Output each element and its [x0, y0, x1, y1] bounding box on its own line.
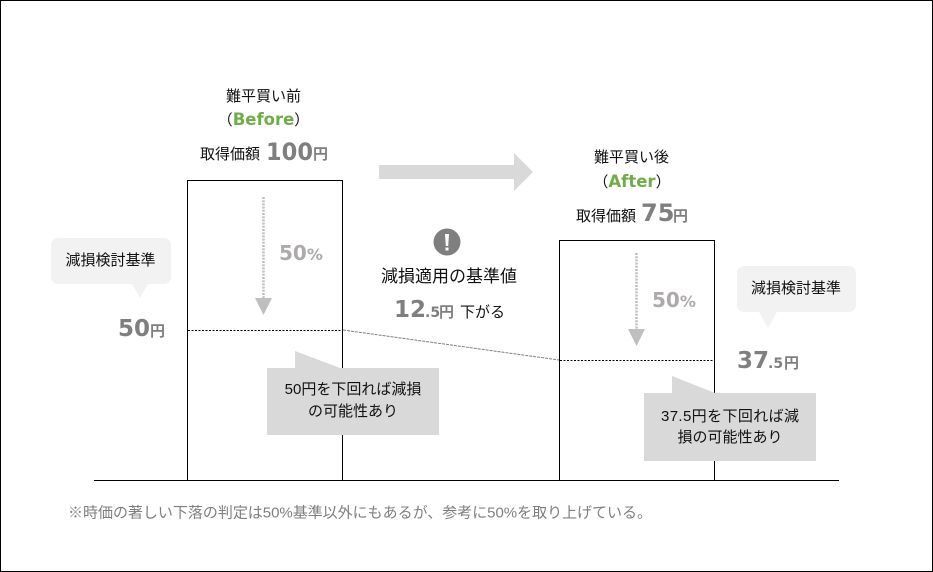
after bar — [560, 240, 714, 480]
text: criterion change: 減損適用の基準値 — [381, 267, 517, 286]
value: 12.5 yen decrease: .5 — [425, 305, 440, 321]
speech bubble: before criterion: 減損検討基準 — [65, 252, 156, 269]
heading: after: 難平買い後 — [594, 149, 669, 166]
footnote: ※時価の著しい下落の判定は50%基準以外にもあるが、参考に50%を取り上げている。 — [68, 504, 652, 522]
heading: before: 取得価額 — [200, 146, 260, 163]
connector line between thresholds — [343, 330, 559, 360]
heading: before: 難平買い前 — [226, 88, 301, 105]
callout: before — [267, 351, 439, 435]
value: 12.5 yen decrease: 12 — [394, 297, 426, 323]
heading: after — [576, 149, 688, 227]
heading: after: 75 — [641, 199, 674, 227]
value: before criterion 50 yen: 50 — [118, 316, 150, 342]
before threshold line — [188, 330, 342, 332]
down arrow: before 50% — [255, 197, 272, 315]
before bar — [188, 180, 342, 480]
callout: before: 50円を下回れば減損 — [285, 381, 421, 398]
label: before 50%: 50% — [279, 241, 323, 265]
value: before criterion 50 yen: 円 — [150, 323, 165, 340]
icon: exclamation — [434, 228, 460, 256]
speech bubble: after criterion: 減損検討基準 — [751, 280, 841, 297]
down arrow: after 50% — [628, 253, 645, 346]
heading: before: （Before） — [218, 110, 309, 129]
value: after criterion 37.5 yen: 円 — [784, 355, 799, 372]
baseline axis — [94, 480, 839, 482]
heading: before: 100 — [266, 138, 313, 166]
speech bubble: after criterion — [737, 266, 856, 328]
callout: after: 損の可能性あり — [677, 429, 783, 446]
heading: after: 取得価額 — [576, 208, 636, 225]
big arrow: before to after — [379, 153, 533, 191]
callout: after: 37.5円を下回れば減 — [661, 408, 799, 425]
heading: before — [200, 88, 328, 166]
heading: after: （After） — [593, 172, 671, 191]
value: after criterion 37.5 yen: .5 — [768, 356, 783, 372]
callout: after — [644, 376, 816, 461]
heading: before: 円 — [313, 146, 328, 163]
value: after criterion 37.5 yen: 37 — [737, 348, 769, 374]
speech bubble: before criterion — [51, 238, 171, 298]
value: 12.5 yen decrease — [394, 297, 505, 323]
callout: before: の可能性あり — [308, 403, 398, 420]
label: after 50%: 50% — [652, 288, 696, 312]
heading: after: 円 — [673, 208, 688, 225]
value: 12.5 yen decrease: 下がる — [460, 304, 505, 321]
value: 12.5 yen decrease: 円 — [439, 304, 454, 321]
value: before criterion 50 yen — [118, 316, 165, 342]
value: after criterion 37.5 yen — [737, 348, 799, 374]
after threshold line — [560, 360, 714, 362]
